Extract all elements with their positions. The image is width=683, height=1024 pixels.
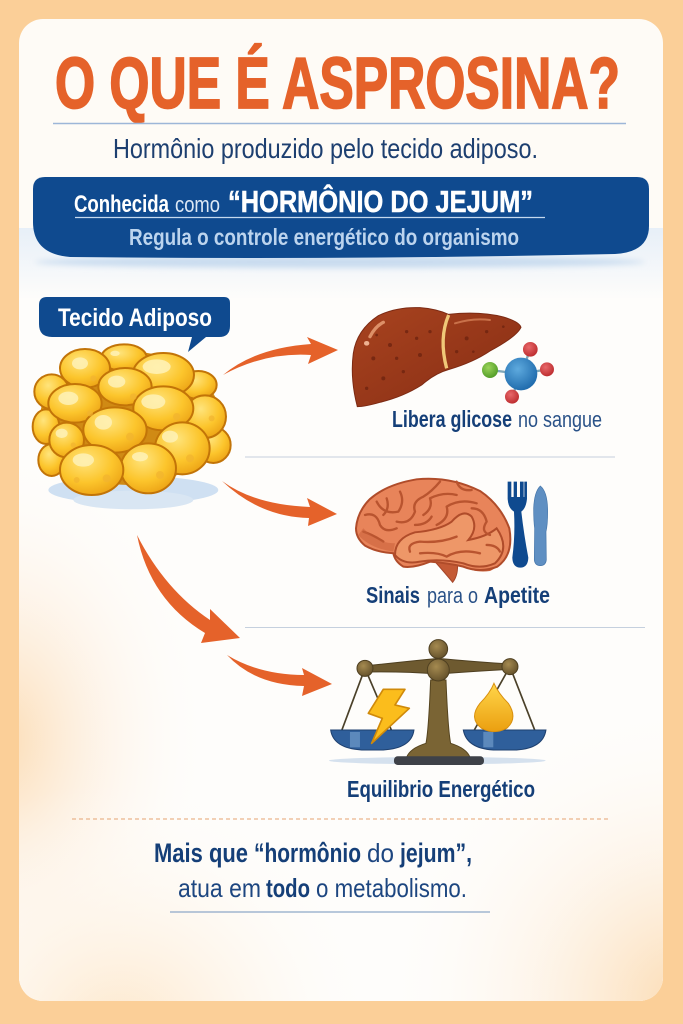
icon: oil drop <box>475 683 513 732</box>
banner text: hormone of fasting: “HORMÔNIO DO JEJUM” <box>228 183 533 219</box>
label: liver: no sangue <box>518 407 602 432</box>
closing text: o metabolismo. <box>316 873 467 903</box>
arrow: to scale <box>227 655 332 696</box>
pan highlights <box>350 732 493 747</box>
label: brain: Sinais <box>366 582 420 608</box>
arrow: to liver <box>223 337 338 375</box>
subtitle: Hormônio produzido pelo tecido adiposo. <box>113 133 538 164</box>
icon: energy balance scale <box>329 640 546 765</box>
closing text: Mais que <box>154 838 248 868</box>
pan: right <box>463 730 546 750</box>
icon: adipose tissue cells <box>33 344 231 509</box>
banner text: regulation: Regula o controle energético do organismo <box>129 224 519 250</box>
pan: left <box>331 730 414 750</box>
icon: lightning bolt <box>368 689 409 743</box>
icon: fork and knife <box>508 482 548 568</box>
closing text: todo <box>266 873 310 903</box>
banner text: como: como <box>175 192 220 217</box>
label: brain <box>366 582 550 608</box>
icon: liver <box>352 308 521 407</box>
arrow: downward <box>137 535 240 643</box>
icon: glucose molecule <box>482 342 554 404</box>
closing text: jejum”, <box>399 838 472 868</box>
closing text: atua em <box>178 873 261 903</box>
arrow: to brain <box>222 481 337 526</box>
callout: Tecido Adiposo: Tecido Adiposo <box>58 304 212 332</box>
icon: brain <box>356 479 510 582</box>
label: scale: Equilibrio Energético <box>347 776 535 802</box>
label: brain: Apetite <box>484 582 550 608</box>
label: liver: Libera glicose <box>392 406 512 432</box>
banner text: Conhecida: Conhecida <box>74 191 170 218</box>
label: brain: para o <box>427 583 478 608</box>
callout: Tecido Adiposo <box>39 297 230 352</box>
closing text: “hormônio <box>254 838 361 868</box>
closing text <box>154 838 472 903</box>
closing text: do <box>367 838 394 868</box>
panel: definition banner <box>33 177 649 258</box>
